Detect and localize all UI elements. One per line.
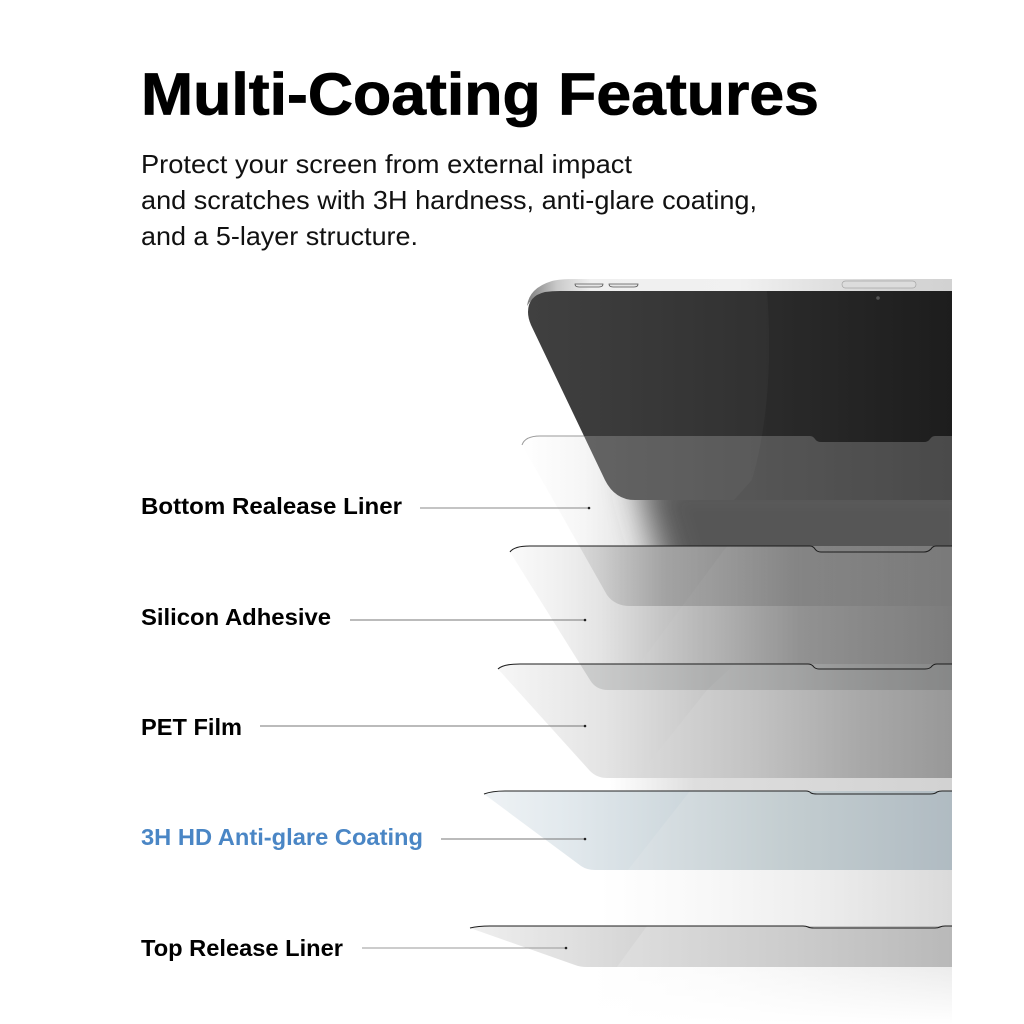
label: PET film: PET Film — [141, 714, 242, 740]
power button — [842, 281, 916, 288]
top edge with notch — [510, 546, 952, 552]
intro text: Protect your screen from external impact — [141, 149, 633, 179]
top edge with notch — [470, 926, 952, 928]
intro text: and scratches with 3H hardness, anti-glare coating, — [141, 185, 757, 215]
shadow gap under PET film — [610, 778, 952, 791]
reflection — [620, 546, 952, 690]
tablet screen reflection — [528, 291, 769, 510]
right panel — [628, 791, 952, 870]
liner overlap — [580, 546, 856, 606]
label: silicon adhesive: Silicon Adhesive — [141, 604, 331, 630]
layer: silicon adhesive — [510, 546, 952, 664]
camera — [876, 296, 880, 300]
shadow under coating — [590, 870, 952, 926]
layer: bottom release liner — [522, 436, 952, 546]
tablet — [527, 279, 952, 500]
top edge with notch — [498, 664, 952, 669]
right panel — [772, 664, 952, 778]
intro text: and a 5-layer structure. — [141, 221, 418, 251]
label: top release liner: Top Release Liner — [141, 935, 343, 961]
title: Multi-Coating Features — [141, 62, 819, 128]
liner overlay on tablet — [584, 436, 952, 500]
tablet dark screen — [528, 291, 952, 500]
layer: anti-glare coating — [484, 791, 952, 870]
shadow under top liner — [590, 967, 952, 1024]
right panel — [617, 926, 952, 967]
layer: top release liner — [470, 926, 952, 967]
volume buttons — [575, 284, 638, 287]
layer: PET film — [498, 664, 952, 778]
intro text — [141, 149, 757, 251]
label: 3H HD anti-glare coating: 3H HD Anti-glare Coating — [141, 824, 423, 850]
tablet cast shadow — [618, 496, 952, 546]
tablet silver frame — [527, 279, 952, 306]
top edge with notch — [484, 791, 952, 794]
label: bottom release liner: Bottom Realease Liner — [141, 493, 402, 519]
overlap band — [580, 664, 952, 690]
